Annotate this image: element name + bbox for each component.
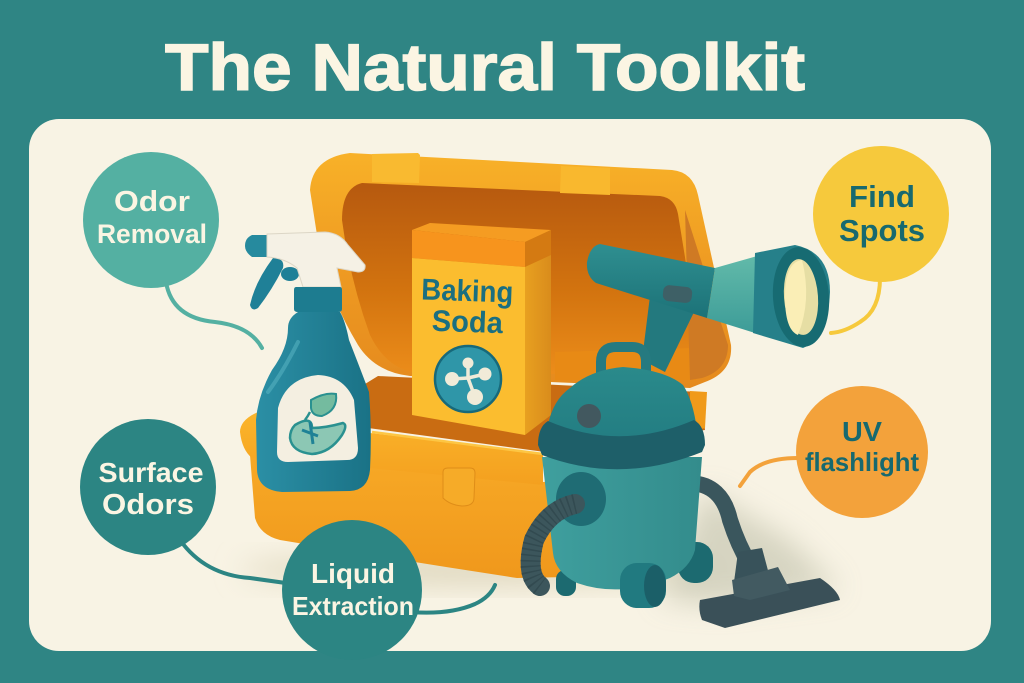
callout: Surface Odors: Odors xyxy=(102,489,194,521)
callout: Surface Odors: Surface xyxy=(98,457,204,488)
callout: Find Spots: Find xyxy=(849,179,915,214)
vacuum body xyxy=(542,457,702,589)
front wheel xyxy=(620,563,666,608)
handle stem xyxy=(642,296,695,372)
toolbox base xyxy=(240,391,707,578)
vacuum back wheels xyxy=(556,542,713,596)
bottle body xyxy=(256,312,371,492)
callout: UV flashlight xyxy=(740,386,928,518)
switch xyxy=(662,285,693,304)
hose left xyxy=(531,504,575,586)
illustration: ground shadows xyxy=(240,490,840,605)
hose socket xyxy=(556,472,606,526)
callout: Surface Odors xyxy=(80,419,300,585)
callout: Liquid Extraction: Extraction xyxy=(292,591,414,621)
trigger xyxy=(250,258,283,309)
illustration: UV flashlight xyxy=(587,244,832,372)
callout: Odor Removal xyxy=(83,152,262,348)
callout: Odor Removal: Removal xyxy=(97,219,207,249)
callout: Liquid Extraction: Liquid xyxy=(311,558,395,589)
lid button xyxy=(577,404,601,428)
illustration: toolbox xyxy=(240,153,731,578)
hose right xyxy=(690,483,750,565)
bottle label xyxy=(277,375,358,462)
lens bezel xyxy=(753,245,830,348)
illustration: spray bottle xyxy=(245,232,371,492)
box label: Baking xyxy=(421,273,514,310)
panel: cream card xyxy=(29,119,991,651)
toolbox lid xyxy=(310,153,731,388)
nozzle xyxy=(245,235,268,257)
illustration: vacuum cleaner xyxy=(531,347,840,628)
sprayer head xyxy=(267,232,365,287)
callout: UV flashlight: UV xyxy=(842,416,882,447)
callout: Find Spots xyxy=(813,146,949,333)
callout: UV flashlight: flashlight xyxy=(805,447,919,477)
title: The Natural Toolkit xyxy=(165,30,805,104)
handle xyxy=(601,347,646,375)
callout: Find Spots: Spots xyxy=(839,213,925,248)
vacuum lid xyxy=(548,367,697,442)
toolbox base interior xyxy=(365,376,705,452)
illustration: baking soda box: Soda xyxy=(431,305,504,340)
icon: leaf xyxy=(290,394,345,454)
flashlight head xyxy=(707,253,768,333)
floor nozzle xyxy=(699,548,840,628)
icon: molecule xyxy=(435,346,501,412)
bottle cap xyxy=(294,287,342,312)
lens xyxy=(781,258,821,336)
callout: Odor Removal: Odor xyxy=(114,186,190,218)
callout: Liquid Extraction xyxy=(282,520,495,660)
vacuum collar xyxy=(538,420,705,469)
flashlight barrel xyxy=(587,244,715,318)
illustration: baking soda box xyxy=(412,223,551,435)
